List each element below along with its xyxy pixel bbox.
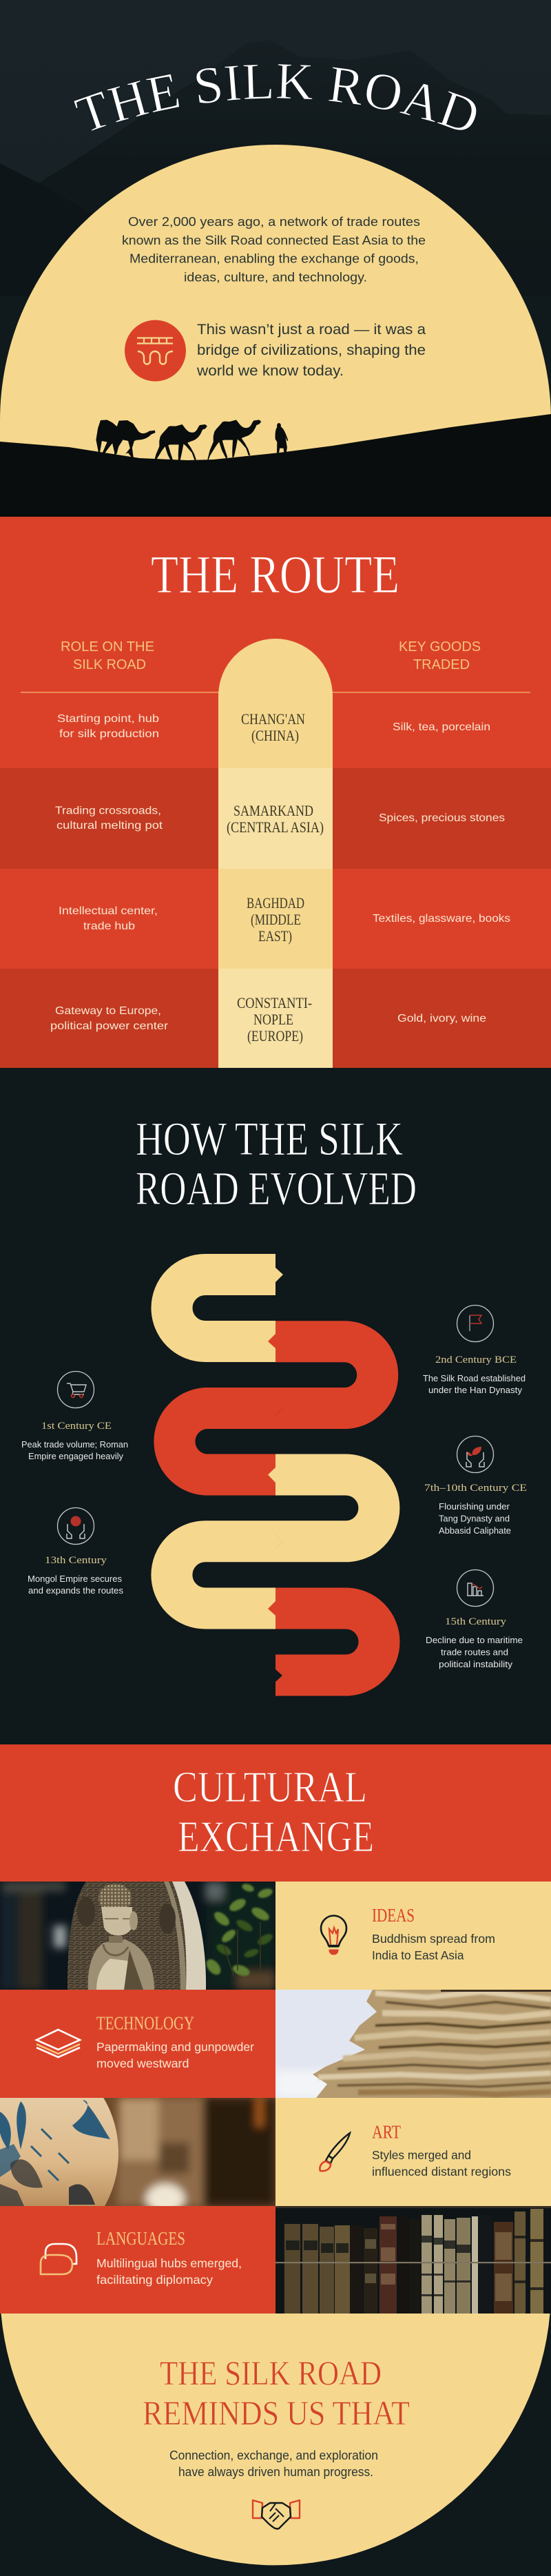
heading: how the silk road evolved: ROAD EVOLVED xyxy=(136,1162,417,1215)
intro paragraph: Over 2,000 years ago, a network of trade routes xyxy=(128,215,420,229)
intro paragraph: Mediterranean, enabling the exchange of goods, xyxy=(129,252,419,266)
cities: BAGHDAD xyxy=(247,894,304,911)
heading: the route: THE ROUTE xyxy=(151,544,399,604)
milestone: 2nd century BCE: 2nd Century BCE xyxy=(435,1354,517,1366)
photo: antique books on shelf xyxy=(276,2206,551,2314)
panel: the route xyxy=(0,517,551,1068)
roles xyxy=(50,713,169,1032)
icon: paper layers xyxy=(37,2030,80,2057)
callout text: world we know today. xyxy=(196,363,344,379)
heading: cultural exchange: EXCHANGE xyxy=(178,1812,374,1861)
roles: cultural melting pot xyxy=(56,820,163,832)
closing message: have always driven human progress. xyxy=(178,2465,373,2479)
column heading: goods: TRADED xyxy=(413,657,470,672)
milestone: 7th-10th century: Tang Dynasty and xyxy=(439,1514,510,1524)
milestone: 7th-10th century xyxy=(424,1436,527,1536)
roles: Trading crossroads, xyxy=(55,805,161,817)
sun semicircle xyxy=(0,145,551,517)
title: the silk road: THE SILK ROAD xyxy=(74,64,477,131)
photo: blue and white porcelain xyxy=(0,2098,276,2206)
cities: (EUROPE) xyxy=(247,1027,303,1044)
cities: SAMARKAND xyxy=(233,802,313,819)
icon: light bulb xyxy=(321,1915,346,1955)
icon: flag xyxy=(457,1305,493,1342)
milestone: 1st century: Empire engaged heavily xyxy=(28,1452,124,1461)
milestone: 2nd century BCE: under the Han Dynasty xyxy=(428,1385,523,1395)
text block: art: Styles merged and xyxy=(372,2148,471,2162)
closing message xyxy=(169,2449,378,2479)
dune xyxy=(0,414,551,517)
heading: cultural exchange: CULTURAL xyxy=(173,1762,367,1811)
roles: Starting point, hub xyxy=(57,713,159,725)
milestone: 2nd century BCE: The Silk Road established xyxy=(423,1374,526,1383)
icon: paint brush xyxy=(320,2133,350,2171)
text block: languages: facilitating diplomacy xyxy=(96,2273,213,2287)
center arch column xyxy=(218,639,333,1068)
text block: technology: TECHNOLOGY xyxy=(96,2013,194,2034)
text block: technology xyxy=(0,1990,276,2098)
callout text: This wasn’t just a road — it was a xyxy=(197,322,426,338)
roles: Gateway to Europe, xyxy=(55,1005,161,1017)
milestone: 15th century xyxy=(426,1569,523,1669)
milestone: 7th-10th century: 7th–10th Century CE xyxy=(424,1483,527,1494)
panel: closing xyxy=(0,2314,551,2576)
callout text: bridge of civilizations, shaping the xyxy=(197,342,426,358)
panel: cultural exchange xyxy=(0,1744,551,2314)
text block: ideas: Buddhism spread from xyxy=(372,1932,495,1946)
arch shape xyxy=(1,2314,550,2565)
text block: art: influenced distant regions xyxy=(372,2165,511,2178)
goods xyxy=(373,721,510,1024)
callout text xyxy=(196,322,426,379)
photo: buddha statue xyxy=(0,1882,276,1990)
cities: NOPLE xyxy=(253,1011,293,1028)
column heading: goods: KEY GOODS xyxy=(399,639,481,655)
milestone: 7th-10th century: Abbasid Caliphate xyxy=(439,1526,511,1536)
panel: hero xyxy=(0,0,551,517)
heading: cultural exchange xyxy=(173,1762,374,1861)
milestone: 13th century: 13th Century xyxy=(45,1555,107,1566)
icon: handshake xyxy=(253,2500,300,2529)
milestone: 2nd century BCE xyxy=(423,1305,526,1395)
roles: for silk production xyxy=(59,728,159,740)
heading: the silk road reminds us that: THE SILK ROAD xyxy=(160,2353,382,2392)
milestone: 13th century: and expands the routes xyxy=(28,1586,123,1596)
cities: (CHINA) xyxy=(251,727,299,744)
text block: languages: Multilingual hubs emerged, xyxy=(96,2256,242,2270)
photo: stacked old paper xyxy=(276,1990,551,2098)
text block: ideas xyxy=(276,1882,551,1990)
column heading: goods xyxy=(399,639,481,672)
heading: the silk road reminds us that: REMINDS US THAT xyxy=(143,2393,410,2432)
icon: plant in hands xyxy=(457,1436,493,1473)
roles: Intellectual center, xyxy=(59,905,158,917)
serpentine road xyxy=(171,1268,379,1682)
intro paragraph xyxy=(122,215,426,284)
icon: globe in hands xyxy=(58,1507,94,1545)
milestone: 15th century: 15th Century xyxy=(445,1616,507,1627)
goods: Spices, precious stones xyxy=(379,812,505,824)
cities: CONSTANTI- xyxy=(237,994,312,1011)
roles: political power center xyxy=(50,1020,169,1032)
text block: ideas: IDEAS xyxy=(372,1905,415,1926)
milestone: 1st century: 1st Century CE xyxy=(41,1421,112,1432)
cities xyxy=(227,710,324,1044)
milestone: 1st century xyxy=(21,1371,128,1461)
milestone: 1st century: Peak trade volume; Roman xyxy=(21,1440,128,1450)
cities: (MIDDLE xyxy=(251,911,301,928)
row stripes xyxy=(0,768,551,1068)
text block: ideas: India to East Asia xyxy=(372,1948,464,1962)
text block: languages xyxy=(0,2206,276,2314)
text block: technology: Papermaking and gunpowder xyxy=(96,2040,254,2054)
panel: evolution timeline xyxy=(0,1068,551,1744)
intro paragraph: ideas, culture, and technology. xyxy=(184,270,367,284)
goods: Textiles, glassware, books xyxy=(373,913,510,925)
text block: art: ART xyxy=(372,2122,401,2143)
milestone: 7th-10th century: Flourishing under xyxy=(439,1502,510,1512)
icon: speech bubbles xyxy=(41,2244,76,2274)
text block: languages: LANGUAGES xyxy=(96,2228,185,2249)
divider line xyxy=(21,692,530,693)
column heading: role: ROLE ON THE xyxy=(61,639,154,655)
cities: CHANG'AN xyxy=(241,710,305,728)
icon: declining chart xyxy=(457,1569,493,1607)
icon: cart xyxy=(58,1371,94,1408)
milestone: 13th century: Mongol Empire secures xyxy=(28,1574,122,1584)
column heading: role xyxy=(61,639,154,672)
heading: how the silk road evolved: HOW THE SILK xyxy=(136,1113,403,1165)
text block: technology: moved westward xyxy=(96,2057,189,2070)
milestone: 15th century: political instability xyxy=(439,1660,513,1669)
goods: Silk, tea, porcelain xyxy=(393,721,490,733)
milestone: 13th century xyxy=(28,1507,123,1596)
roles: trade hub xyxy=(83,920,135,932)
column heading: role: SILK ROAD xyxy=(73,657,146,672)
cities: EAST) xyxy=(258,927,292,945)
closing message: Connection, exchange, and exploration xyxy=(169,2449,378,2462)
goods: Gold, ivory, wine xyxy=(397,1013,486,1024)
icon: bridge xyxy=(125,320,186,382)
milestone: 15th century: trade routes and xyxy=(441,1648,508,1658)
heading: how the silk road evolved xyxy=(136,1113,417,1215)
text block: art xyxy=(276,2098,551,2206)
milestone: 15th century: Decline due to maritime xyxy=(426,1636,523,1645)
camel caravan silhouettes xyxy=(96,420,288,464)
cities: (CENTRAL ASIA) xyxy=(227,818,324,836)
intro paragraph: known as the Silk Road connected East Asia to the xyxy=(122,234,426,247)
heading: the silk road reminds us that xyxy=(143,2353,410,2432)
